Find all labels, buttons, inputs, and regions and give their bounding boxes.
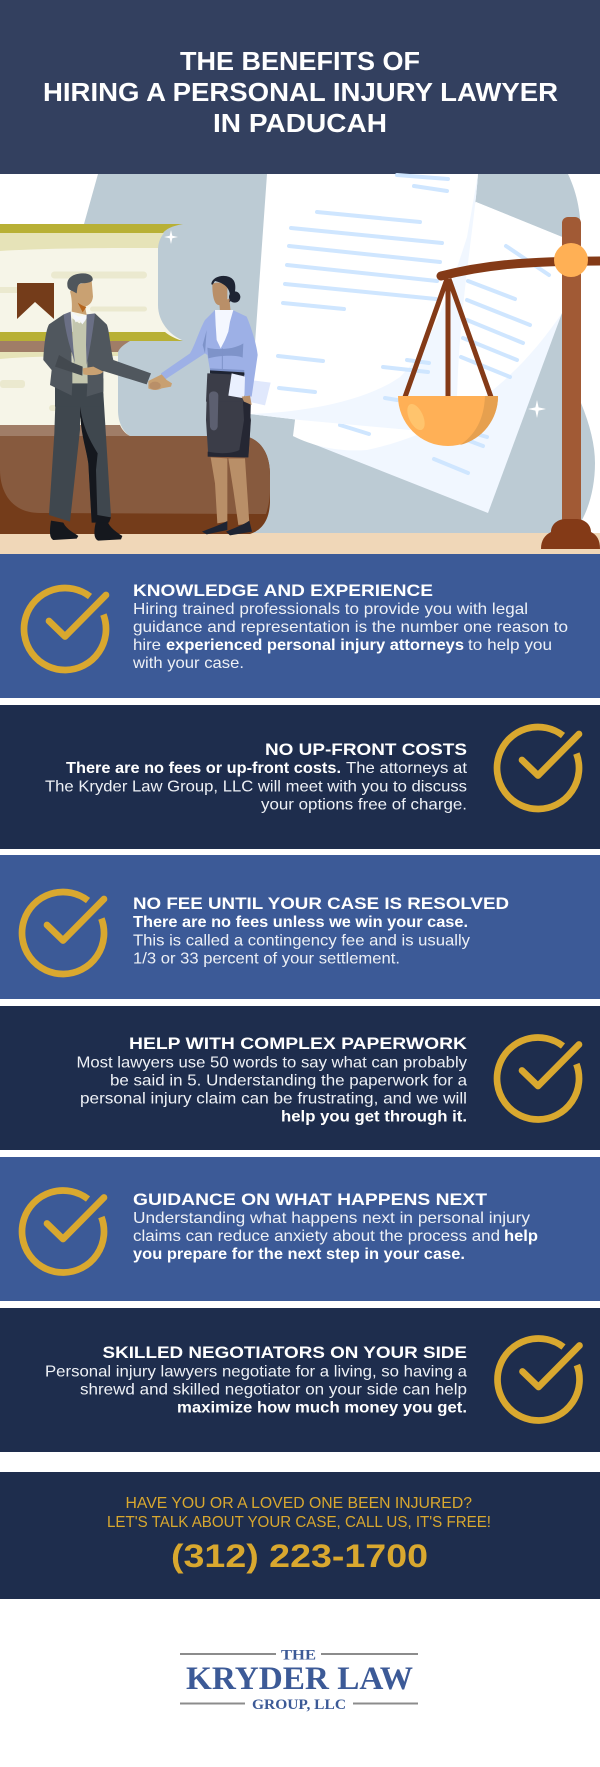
body text: The Kryder Law Group, LLC will meet with you to discuss [45,778,467,796]
icon: gold check circle [498,1339,580,1421]
heading: KNOWLEDGE AND EXPERIENCE [133,581,433,600]
phone number: (312) 223-1700 [171,1538,428,1574]
panel: help with complex paperwork [0,1006,600,1150]
body text: to help you [468,637,552,654]
document: front sheet [250,174,478,430]
logo: The Kryder Law Group, LLC [180,1648,418,1713]
scales of justice [398,217,600,549]
body text: personal injury claim can be frustrating, and we will [80,1090,467,1108]
body text: Most lawyers use 50 words to say what can probably [76,1054,467,1072]
heading: NO FEE UNTIL YOUR CASE IS RESOLVED [133,894,509,913]
body text: guidance and representation is the number one reason to [133,619,568,636]
body text: be said in 5. Understanding the paperwork for a [110,1072,467,1090]
icon: gold check circle [497,1038,579,1120]
body text: help you get through it. [281,1108,467,1126]
title: IN PADUCAH [213,110,387,138]
panel: call to action [0,1472,600,1599]
title: HIRING A PERSONAL INJURY LAWYER [43,79,558,107]
body text: This is called a contingency fee and is usually [133,932,470,950]
body text: help [504,1228,538,1245]
body text [132,601,568,672]
body text: Personal injury lawyers negotiate for a living, so having a [45,1364,467,1380]
body text: shrewd and skilled negotiator on your side can help [80,1382,467,1398]
body text: experienced personal injury attorneys [166,637,464,654]
body text: hire [133,637,161,654]
title banner [0,0,600,174]
figure: man in suit [43,273,151,541]
logo: The Kryder Law Group, LLC: GROUP, LLC [252,1697,346,1713]
document: back sheet [293,202,572,513]
illustration: lawyer handshake with documents and scales [0,174,600,554]
body text: There are no fees unless we win your case. [133,914,468,931]
figure: woman in blouse [148,276,271,535]
background blob [84,174,595,533]
body text: maximize how much money you get. [177,1400,467,1416]
body text: you prepare for the next step in your case. [133,1246,465,1263]
call to action text: HAVE YOU OR A LOVED ONE BEEN INJURED? [126,1495,472,1512]
body text: your options free of charge. [261,796,467,814]
body text: The attorneys at [346,760,468,777]
icon: gold check circle [24,588,106,670]
body text [45,760,468,814]
heading: NO UP-FRONT COSTS [265,740,467,759]
title [43,48,558,138]
body text: There are no fees or up-front costs. [66,760,341,777]
body text: claims can reduce anxiety about the process and [133,1228,500,1245]
heading: HELP WITH COMPLEX PAPERWORK [129,1034,468,1053]
logo: The Kryder Law Group, LLC: THE [281,1648,316,1664]
body text: with your case. [132,655,244,672]
panel: no up-front costs [0,705,600,849]
heading: SKILLED NEGOTIATORS ON YOUR SIDE [102,1343,467,1362]
body text [133,1210,538,1263]
panel: knowledge and experience [0,554,600,698]
panel: no fee until your case is resolved [0,855,600,999]
heading: GUIDANCE ON WHAT HAPPENS NEXT [133,1190,488,1209]
logo: The Kryder Law Group, LLC: KRYDER LAW [186,1661,413,1697]
call to action text [107,1495,491,1531]
sparkles [164,230,546,418]
body text [76,1054,467,1126]
body text: Understanding what happens next in personal injury [133,1210,530,1227]
title: THE BENEFITS OF [180,48,420,76]
call to action text: LET'S TALK ABOUT YOUR CASE, CALL US, IT'S FREE! [107,1514,491,1531]
panel: skilled negotiators on your side [0,1308,600,1452]
law books [0,224,270,534]
icon: gold check circle [497,727,579,809]
body text: Hiring trained professionals to provide you with legal [133,601,528,618]
body text: 1/3 or 33 percent of your settlement. [133,950,400,968]
icon: gold check circle [22,1191,104,1273]
body text [133,914,470,968]
floor [0,533,600,554]
panel: guidance on what happens next [0,1157,600,1301]
body text [45,1364,467,1416]
icon: gold check circle [22,892,104,974]
